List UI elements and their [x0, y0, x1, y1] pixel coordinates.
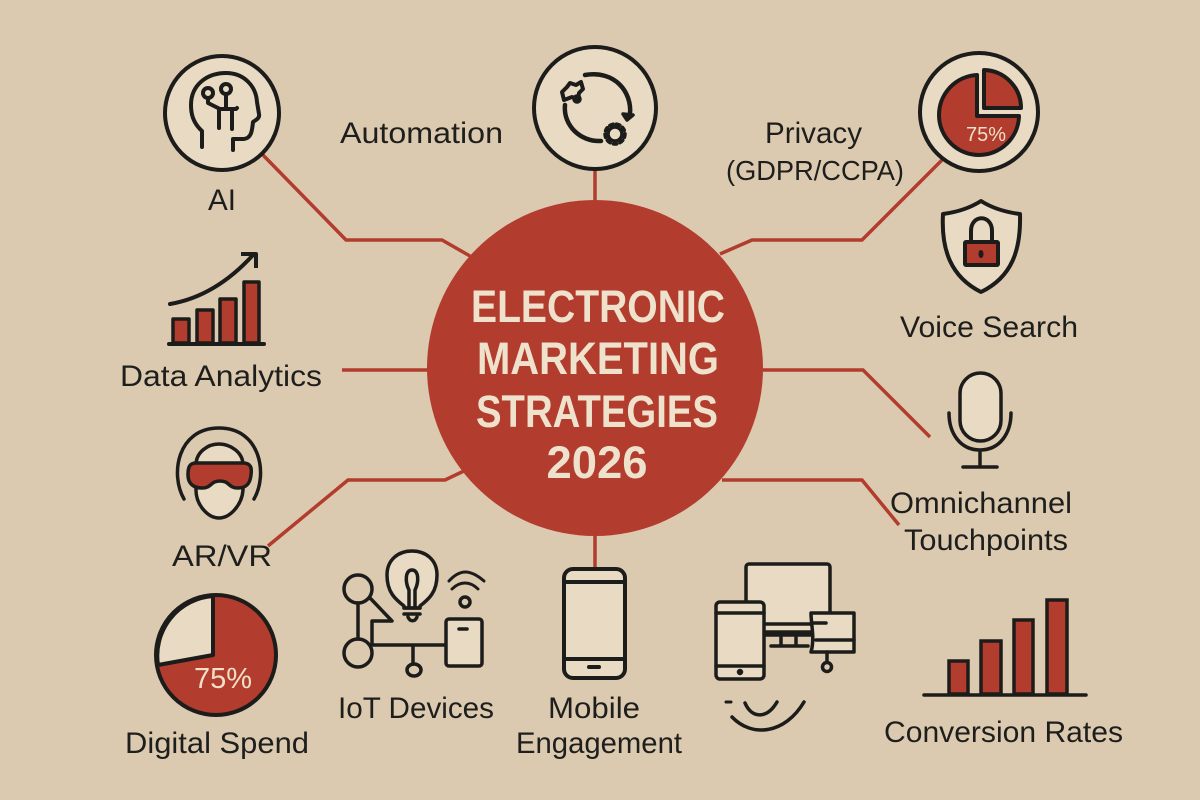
central hub circle	[427, 200, 763, 536]
icon: Digital Spend pie	[156, 595, 276, 715]
icon: Data Analytics chart	[169, 254, 264, 344]
connector lines	[262, 154, 942, 570]
label: Privacy: (GDPR/CCPA)	[726, 155, 904, 186]
icon: microphone	[949, 373, 1011, 467]
label: Voice Search: Voice Search	[900, 311, 1078, 344]
label: AR/VR: AR/VR	[172, 540, 272, 573]
icon: smartphone	[564, 569, 625, 678]
label: Data Analytics: Data Analytics	[120, 360, 322, 393]
75% value: 75%	[966, 124, 1006, 146]
label: Automation: Automation	[340, 117, 503, 150]
label: Omnichannel Touchpoints: Omnichannel	[890, 487, 1072, 520]
icon: Conversion Rates chart	[924, 600, 1086, 695]
icon: IoT devices	[344, 551, 484, 676]
icon: shield lock	[943, 201, 1020, 292]
label: Mobile Engagement: Engagement	[516, 727, 683, 760]
icon: AR/VR headset	[177, 428, 261, 518]
label: Conversion Rates: Conversion Rates	[884, 716, 1123, 749]
label: Digital Spend: Digital Spend	[125, 727, 309, 760]
label: Privacy	[726, 117, 904, 186]
hub title: ELECTRONIC	[471, 281, 725, 332]
label: Mobile Engagement: Mobile	[548, 692, 640, 725]
icon: omnichannel devices	[716, 564, 854, 730]
label: Mobile Engagement	[516, 692, 683, 760]
icon: AI head	[165, 56, 279, 170]
hub title: STRATEGIES	[476, 386, 718, 437]
label: AI: AI	[208, 184, 236, 217]
hub title: 2026	[546, 437, 648, 488]
icon: Automation gears	[534, 47, 656, 169]
label: IoT Devices: IoT Devices	[338, 692, 494, 725]
label: Omnichannel Touchpoints: Touchpoints	[904, 524, 1068, 557]
hub title	[471, 281, 725, 488]
label: Privacy: Privacy	[765, 117, 862, 150]
icon: Privacy pie chart	[920, 53, 1038, 171]
hub title: MARKETING	[477, 333, 719, 384]
75% value: 75%	[194, 663, 252, 695]
label: Omnichannel Touchpoints	[890, 487, 1072, 557]
